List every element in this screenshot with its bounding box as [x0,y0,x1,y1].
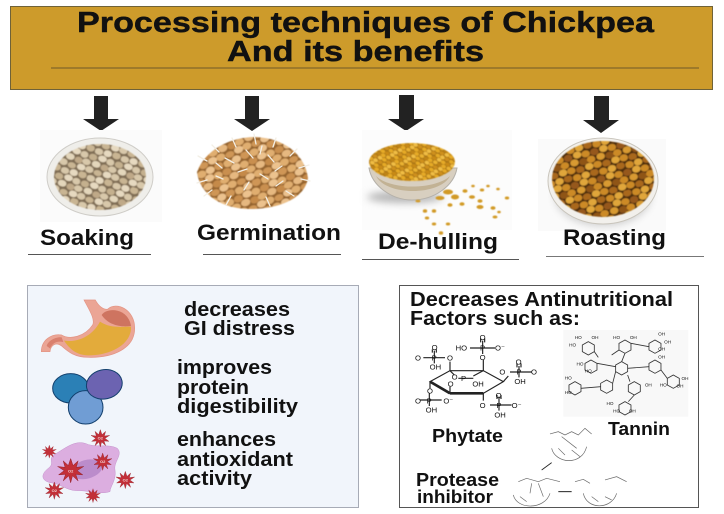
icon: antioxidant cell: O2 [52,488,58,493]
arrow: to de-hulling [388,95,424,131]
arrow: to soaking [83,96,119,131]
icon: bowl of split chickpeas [367,143,509,235]
heading: Factors such as: [410,308,580,330]
chart: tannin structure: OH [645,383,652,388]
icon: antioxidant cell: O2 [68,468,74,473]
chart: phytate structure: O⁻ [495,344,505,353]
chart: tannin structure: OH [591,335,598,340]
panel: de-hulling [362,130,519,260]
chart: phytate structure: O [496,391,502,400]
icon: antioxidant cell: O2 [98,436,104,441]
text: GI distress: GI distress [184,318,295,340]
chart: phytate structure: P [432,353,437,362]
panel: benefits [28,286,358,508]
chart: phytate structure: O [480,353,486,362]
panel: germination [197,134,341,254]
chart: tannin structure: HO [565,390,572,395]
chart: phytate structure: O [480,333,486,342]
chart: tannin structure: HO [606,401,614,406]
chart: tannin structure: HO [613,335,621,340]
chart: phytate structure: HO [456,344,467,353]
chart: phytate structure: O [499,368,505,377]
chart: tannin structure: HO [565,375,572,380]
chart: tannin structure: OH [658,354,665,359]
heading: Decreases Antinutritional [410,289,673,311]
chart: phytate structure: OH [430,362,441,371]
icon: antioxidant cell [42,430,135,503]
panel: soaking [28,130,162,254]
chart: tannin structure: HO [569,343,577,348]
chart: phytate structure: O [432,343,438,352]
chart: tannin structure: OH [658,332,665,337]
chart: tannin structure: OH [629,409,636,414]
chart: phytate structure: O [452,372,458,381]
icon: antioxidant cell: O2 [100,459,106,464]
chart: phytate structure: O⁻ [512,401,522,410]
chart: tannin structure: HO [585,369,592,374]
chart: phytate structure: OH [514,377,526,386]
label: Tannin: Tannin [608,419,670,439]
text: GI distress: decreases [184,299,290,321]
icon: protein [53,366,125,424]
text: protein digestibility: improves [177,357,272,379]
title: Processing techniques of Chickpea [77,7,655,39]
chart: phytate structure: P [427,396,432,405]
label: Protease inhibitor: inhibitor [417,487,493,507]
chart: phytate structure: P [480,344,485,353]
title: And its benefits [227,36,484,68]
chart: tannin structure: OH [630,335,637,340]
chart: phytate structure: P [496,401,501,410]
chart: phytate structure: P [461,374,466,383]
icon: antioxidant cell: O2 [123,477,129,482]
label: Roasting: Roasting [563,225,666,250]
chart: tannin structure [563,330,688,417]
label: De-hulling: De-hulling [378,229,498,254]
chart: tannin structure: OH [681,376,688,381]
chart: tannin structure: HO [660,383,667,388]
chart: phytate structure: O⁻ [443,396,453,405]
label: Germination: Germination [197,220,341,245]
chart: tannin structure: OH [676,383,683,388]
chart: phytate structure: O [531,368,537,377]
chart: phytate structure: O [447,353,453,362]
chart: phytate structure: O [516,358,522,367]
chart: phytate structure: O [448,380,454,389]
chart: tannin structure: HO [576,361,584,366]
chart: tannin structure: HO [613,409,621,414]
chart: phytate structure: P [516,368,521,377]
chart: protease inhibitor mechanism [513,428,627,506]
arrow: to roasting [583,96,619,133]
icon: germinated chickpeas [197,134,310,209]
text: protein digestibility: digestibility [177,396,299,418]
chart: tannin structure: HO [575,335,582,340]
label: Phytate: Phytate [432,426,503,446]
text: protein digestibility: protein [177,377,249,399]
chart: phytate structure: O [480,401,486,410]
arrow: to germination [234,96,270,131]
label: Protease inhibitor: Protease [416,470,499,490]
icon: roasted chickpeas on plate [548,138,658,226]
chart: tannin structure: OH [664,339,671,344]
label: Soaking: Soaking [40,225,134,250]
panel: roasting [538,138,704,256]
chart: phytate structure: O [415,353,421,362]
icon: soaked chickpeas on plate [47,138,153,216]
text: antioxidant activity: enhances [177,429,276,451]
chart: phytate structure [415,333,537,419]
chart: tannin structure: OH [658,347,665,352]
chart: phytate structure: OH [472,380,484,389]
text: antioxidant activity: activity [177,468,253,490]
chart: phytate structure: O [427,386,433,395]
chart: phytate structure: OH [426,406,437,415]
title banner [10,6,712,90]
chart: phytate structure: OH [494,410,506,419]
icon: stomach [41,300,135,357]
text: antioxidant activity: antioxidant [177,449,293,471]
panel: antinutritional factors [400,286,698,508]
chart: phytate structure: O [415,396,421,405]
